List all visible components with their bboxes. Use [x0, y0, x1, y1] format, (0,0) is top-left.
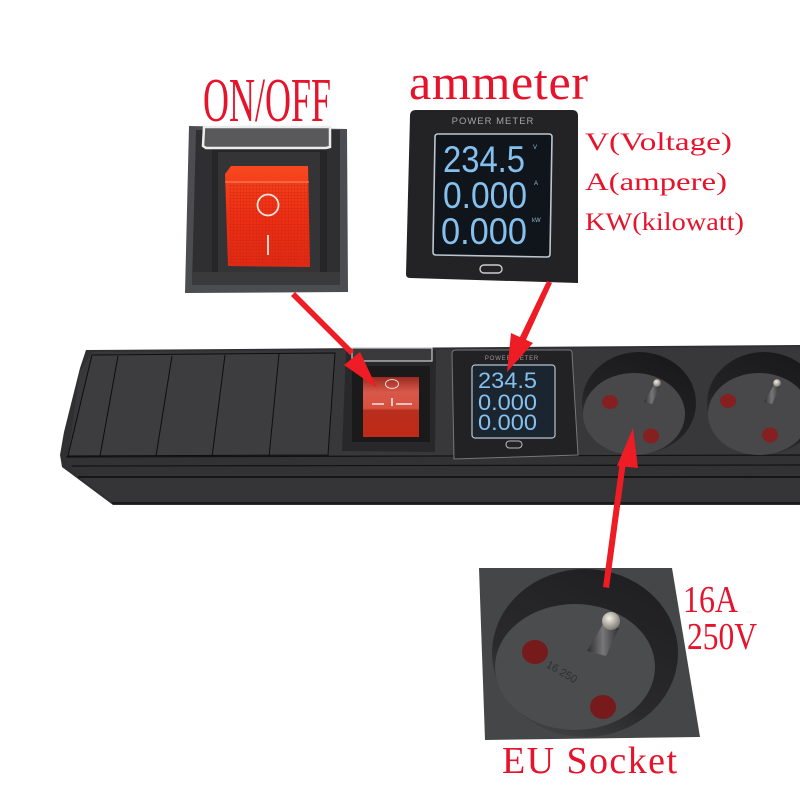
meter readings: 0.000 [478, 410, 537, 435]
meter screen [472, 365, 555, 438]
unit marks: kW [532, 218, 541, 224]
socket pin [644, 385, 660, 404]
strip power meter [452, 350, 578, 459]
red rocker [225, 166, 310, 267]
socket recess [707, 352, 800, 454]
switch bottom lip [192, 272, 340, 285]
socket pin [587, 624, 619, 656]
switch O mark [386, 380, 398, 388]
socket plate [479, 568, 700, 740]
label: voltage: V(Voltage) [585, 129, 732, 156]
socket holes [522, 640, 616, 719]
socket one [582, 352, 696, 455]
meter button [506, 441, 522, 448]
strip side face [80, 478, 800, 503]
switch frame [342, 350, 436, 452]
switch clear cover [352, 348, 432, 361]
socket plate [583, 373, 685, 455]
strip rocker switch [342, 348, 436, 452]
socket holes [602, 395, 659, 444]
meter title: POWER METER [452, 116, 534, 127]
unit marks: A [534, 181, 538, 187]
meter face [406, 110, 578, 283]
voltage reading: 234.5 [443, 139, 525, 180]
strip housing [60, 345, 800, 505]
strip front lip [64, 455, 800, 477]
I symbol [267, 235, 269, 255]
socket recess [582, 352, 696, 454]
embossed rating: 16 250 [544, 659, 579, 686]
meter button [480, 265, 502, 273]
arrow: meter [507, 281, 552, 372]
blank panel modules [68, 353, 335, 457]
kilowatt reading: 0.000 [441, 211, 527, 252]
strip top face [68, 347, 800, 456]
switch bar mark [372, 398, 412, 406]
socket plate [708, 373, 800, 455]
switch red rocker [363, 377, 419, 437]
switch well [212, 148, 327, 280]
label: 16A: 16A [683, 579, 738, 621]
label: EU Socket: EU Socket [502, 740, 677, 782]
socket face [495, 604, 655, 730]
unit marks [532, 145, 541, 224]
power strip body [60, 345, 800, 505]
strip extrusion grooves [66, 455, 800, 503]
socket pin [764, 385, 780, 404]
arrow: socket [603, 428, 638, 588]
meter readings [478, 368, 537, 435]
label: 250V: 250V [687, 616, 757, 658]
meter readings: 0.000 [478, 390, 537, 415]
meter case [452, 350, 578, 459]
meter screen [433, 134, 552, 257]
clear cover [203, 127, 330, 148]
ampere reading: 0.000 [443, 175, 527, 216]
socket two [707, 352, 800, 455]
heading: ON/OFF: ON/OFF [203, 67, 331, 135]
socket recess [492, 569, 678, 737]
unit marks: V [533, 145, 537, 151]
panel: EU socket closeup [479, 568, 700, 740]
meter readings: 234.5 [478, 368, 537, 393]
label: kilowatt: KW(kilowatt) [585, 209, 744, 236]
panel: power meter closeup [406, 110, 578, 283]
switch housing [185, 126, 348, 293]
arrow: switch [291, 292, 377, 388]
panel: switch closeup [185, 126, 348, 293]
heading: ammeter: ammeter [409, 54, 588, 110]
socket holes [720, 394, 778, 442]
pin tip [602, 612, 620, 630]
O symbol [258, 194, 278, 216]
meter title: POWER METER [485, 356, 539, 362]
label: ampere: A(ampere) [585, 169, 727, 196]
